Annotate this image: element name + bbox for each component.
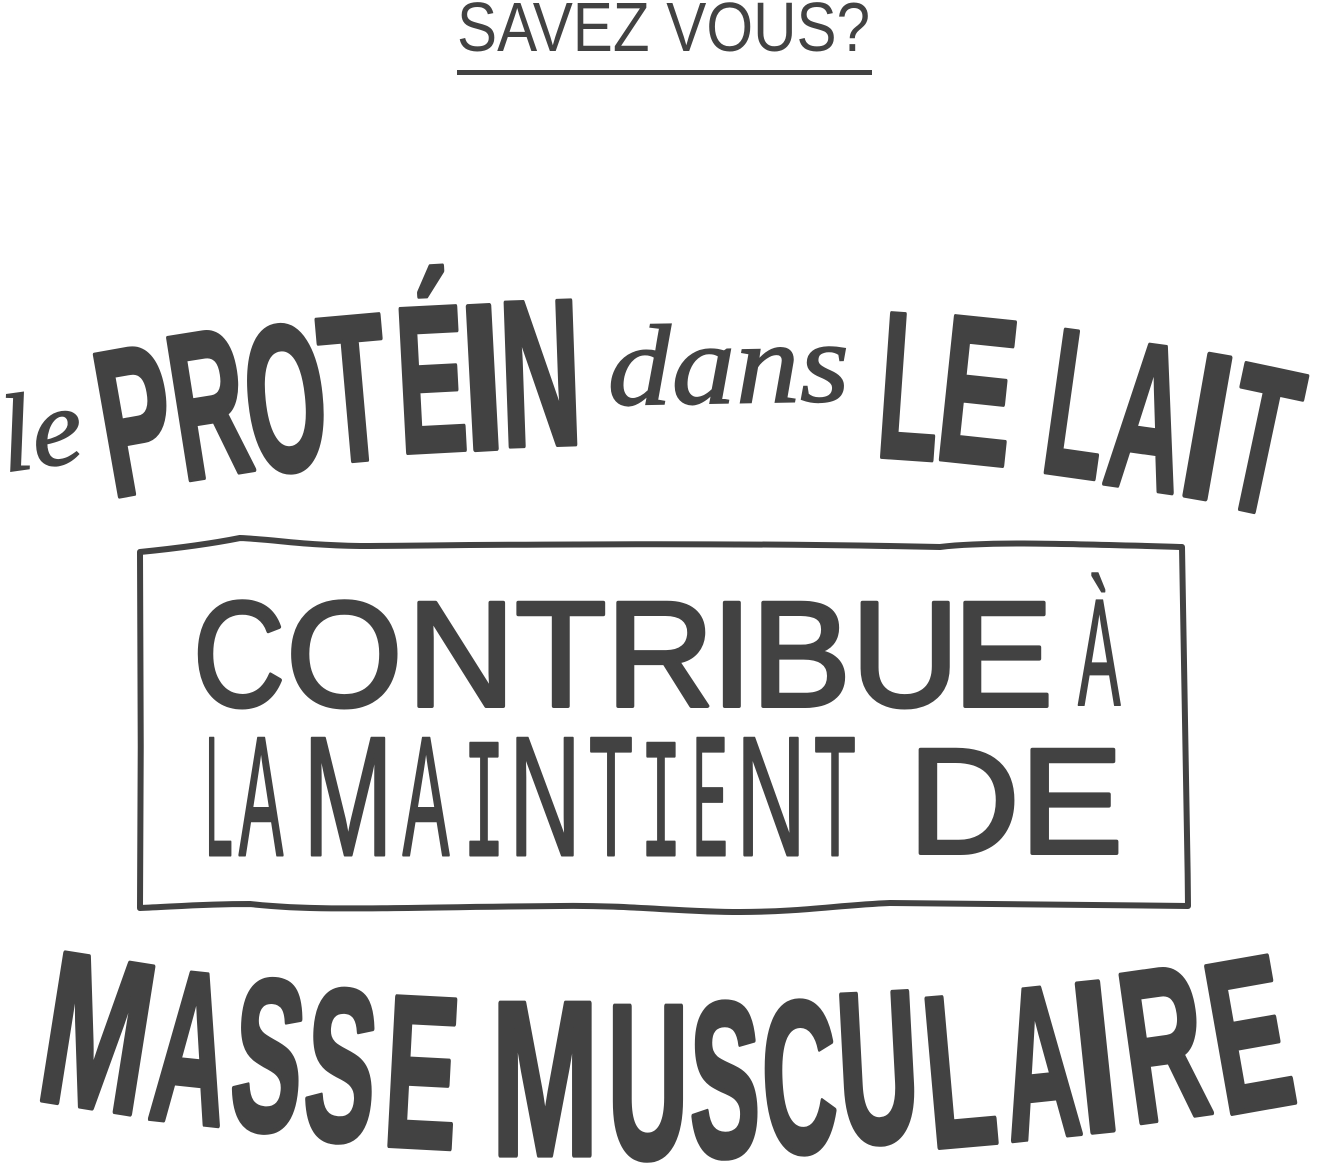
thin narrow words: la maintient: T <box>814 703 856 892</box>
word: protéin: O <box>233 278 338 518</box>
word: protéin: P <box>79 300 192 542</box>
word: lait: L <box>1032 286 1124 524</box>
thin narrow words: la maintient: A <box>239 702 283 892</box>
word: le <box>871 268 1027 510</box>
thin narrow words: la maintient <box>205 701 856 906</box>
word: protéin: N <box>496 257 585 491</box>
thin narrow words: la maintient: N <box>509 701 581 892</box>
word: musculaire <box>491 909 1308 1165</box>
script word: dans: dans <box>606 299 850 430</box>
word: le: E <box>928 272 1027 510</box>
word: lait <box>1032 286 1318 561</box>
thin narrow words: la maintient: E <box>692 701 728 891</box>
word: protéin: T <box>311 271 397 508</box>
framed text: contribue à la maintient de <box>193 567 1123 906</box>
word: musculaire: R <box>1106 918 1221 1165</box>
thin narrow words: la maintient: T <box>589 701 633 891</box>
thin narrow words: la maintient: I <box>463 714 505 906</box>
thin narrow words: la maintient: M <box>303 702 393 892</box>
thin narrow words: la maintient: I <box>640 714 682 906</box>
word: le: L <box>871 268 949 505</box>
thin narrow words: la maintient: N <box>736 702 806 892</box>
word: protéin: É <box>391 261 472 497</box>
word: protéin: I <box>455 260 509 495</box>
word: lait: T <box>1205 320 1318 561</box>
hand-drawn frame <box>140 538 1188 912</box>
word: lait: A <box>1095 296 1201 537</box>
framed text: contribue à la maintient de: À <box>1078 567 1121 738</box>
thin narrow words: la maintient: L <box>205 703 233 892</box>
word: masse: A <box>142 923 242 1165</box>
headline line: le protéin dans le lait <box>0 257 1318 561</box>
word: protéin: R <box>153 283 264 525</box>
word: masse: M <box>26 905 170 1161</box>
framed text: contribue à la maintient de: DE <box>908 717 1123 885</box>
framed text: contribue à la maintient de: C <box>193 571 285 738</box>
headline line: masse musculaire <box>26 905 1308 1165</box>
word: musculaire: E <box>1190 909 1308 1160</box>
framed text: contribue à la maintient de: ONTRIBUE <box>286 570 1053 738</box>
word: masse <box>26 905 465 1165</box>
word: protéin <box>79 257 585 542</box>
word: lait: I <box>1166 308 1249 545</box>
thin narrow words: la maintient: A <box>403 701 450 892</box>
